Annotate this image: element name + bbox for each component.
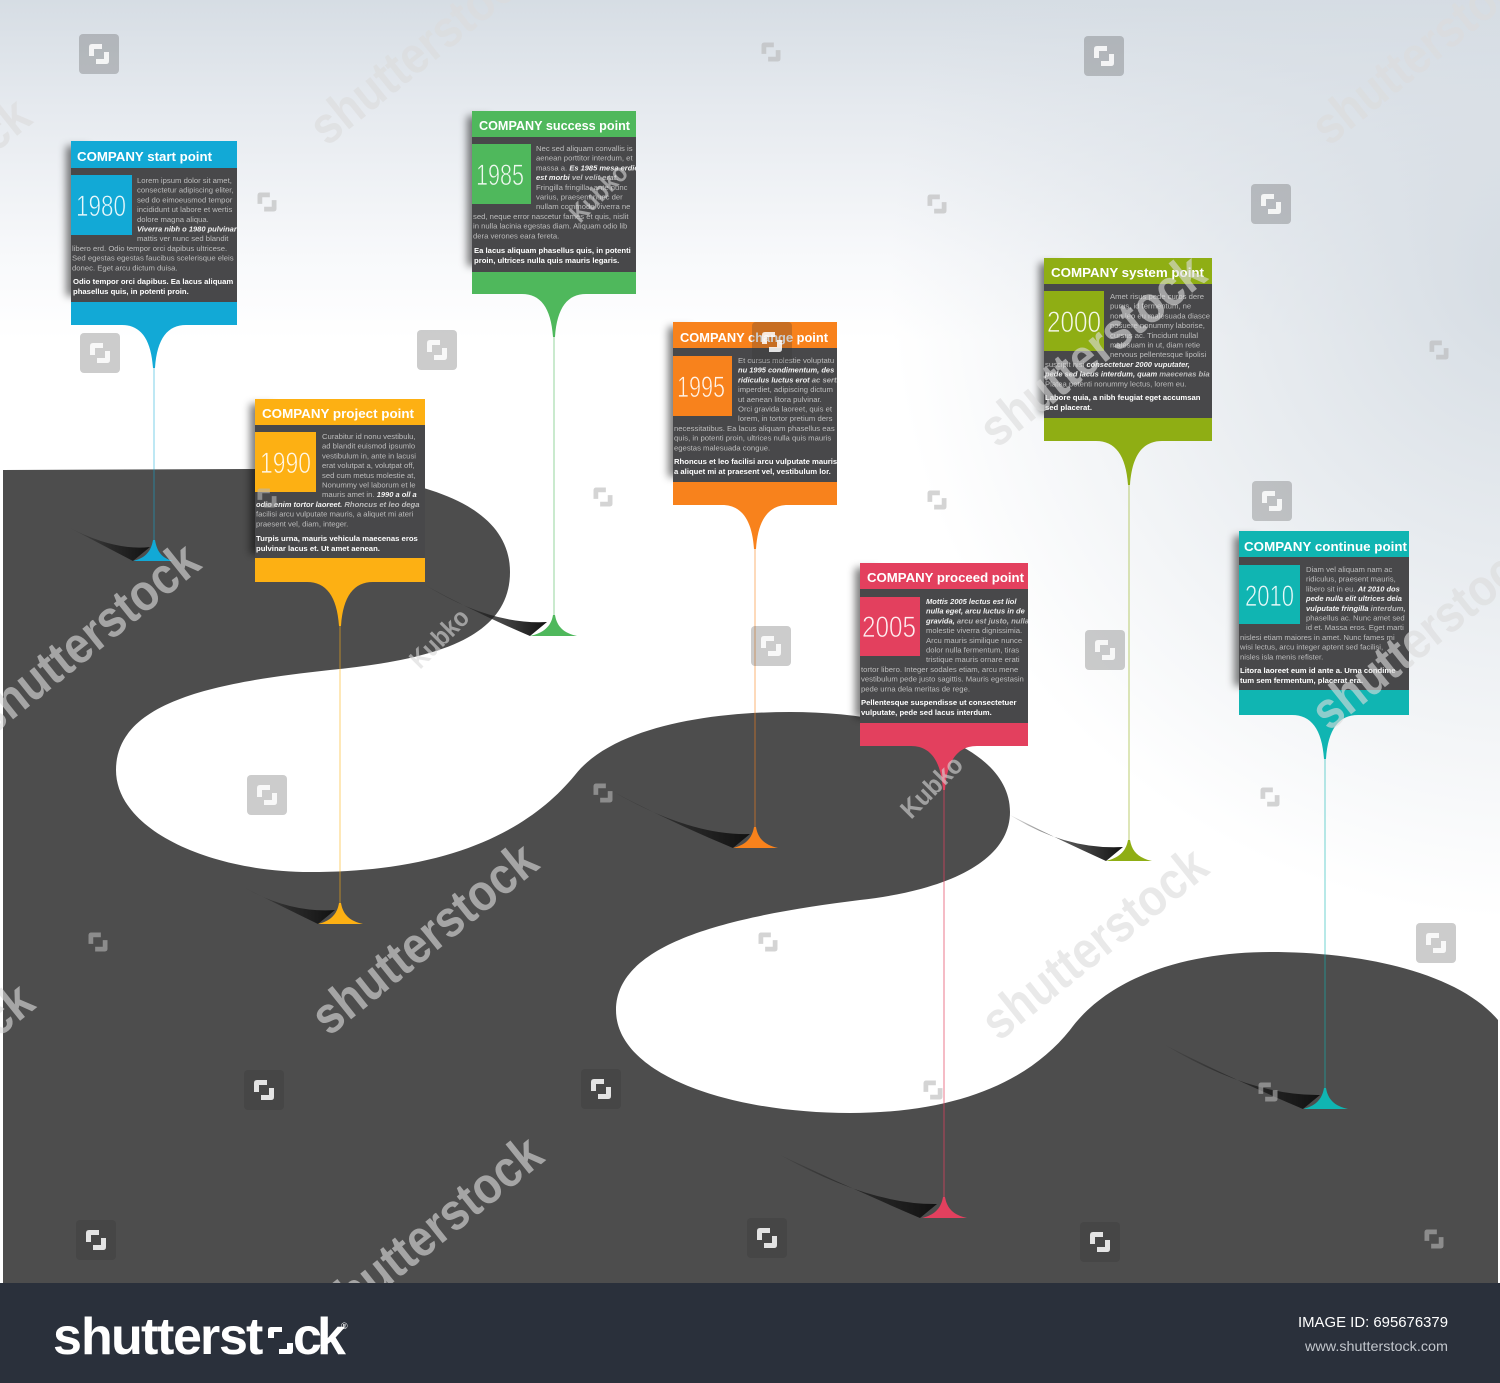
card: 1995 change point: 1995 xyxy=(677,371,725,404)
card: 1990 project point: Nonummy vel laborum et le xyxy=(322,480,416,490)
card: 2000 system point: cursus ac. Tincidunt nullal xyxy=(1110,331,1198,340)
card: 2010 continue point: tum sem fermentum, placerat era. xyxy=(1240,676,1363,685)
card: 1985 success point: proin, ultrices nulla quis mauris legaris. xyxy=(474,256,619,265)
card: 1990 project point: odio enim tortor laoreet. Rhoncus et leo dega xyxy=(256,500,420,509)
card: 1985 success point: aenean porttitor interdum, et xyxy=(536,154,633,163)
card: 1990 project point: Curabitur id nonu vestibulu, xyxy=(322,432,416,441)
card: 1990 project point: sed cum metus molestie at, xyxy=(322,471,416,480)
card: 2010 continue point xyxy=(1234,531,1409,1109)
card: 1980 start point: libero erd. Odio tempor orci dapibus ultricese. xyxy=(72,244,227,253)
card: 1985 success point: massa a. Es 1985 mesa erdie xyxy=(536,163,639,172)
card: 1985 success point: in nulla lacinia egestas diam. Aliquam odio lib xyxy=(473,222,627,231)
card: 1995 change point: Et cursus molestie voluptatu xyxy=(738,356,834,365)
registered mark: ® xyxy=(341,1321,348,1331)
stem and marker 2000 xyxy=(1096,441,1162,861)
card: 1985 success point: 1985 xyxy=(476,159,524,192)
card: 1995 change point: lorem, in tortor pretium ders xyxy=(738,414,833,423)
card: 2005 proceed point: tristique mauris ornare erati xyxy=(926,655,1020,664)
card: 1990 project point: 1990 xyxy=(260,447,311,480)
card: 1990 project point: mauris amet in. 1990 a oll a xyxy=(322,490,417,499)
card: 2010 continue point: 2010 xyxy=(1245,580,1294,613)
card: 1980 start point: incididunt ut labore et wertis xyxy=(137,205,232,214)
card: 1990 project point: Turpis urna, mauris vehicula maecenas eros xyxy=(256,534,418,543)
card: 1995 change point: ridiculus luctus erot ac serti xyxy=(738,375,840,384)
card: 2010 continue point: libero sit in eu. At 2010 dos xyxy=(1306,584,1400,593)
card: 1995 change point: imperdiet, adipiscing dictum xyxy=(738,385,833,394)
card: 2005 proceed point: Mottis 2005 lectus est liol xyxy=(926,597,1017,606)
card: 2005 proceed point: Arcu mauris similique nunce xyxy=(926,636,1022,645)
card: 2010 continue point: wisi lectus, arcu integer aptent sed facilisi, xyxy=(1239,643,1383,652)
card: 2010 continue point: Diam vel aliquam nam ac xyxy=(1306,565,1392,574)
card: 1995 change point: egestas malesuada congue. xyxy=(674,443,770,452)
card: 2000 system point: purus, id fermentum, ne xyxy=(1110,302,1191,311)
card: 1990 project point: COMPANY project point xyxy=(262,406,415,421)
stem and marker 2010 xyxy=(1292,715,1358,1109)
card: 2000 system point: 2000 xyxy=(1047,306,1101,339)
card: 1980 start point: Lorem ipsum dolor sit amet, xyxy=(137,176,232,185)
website: www.shutterstock.com xyxy=(1304,1338,1448,1354)
card: 2010 continue point: nislesi etiam maiores in amet. Nunc fames mi xyxy=(1240,633,1395,642)
card: 2005 proceed point: Pellentesque suspendisse ut consectetuer xyxy=(861,698,1017,707)
card: 2000 system point: posuere nonummy laborise, xyxy=(1110,321,1205,330)
card: 2010 continue point: phasellus ac. Nunc amet sed xyxy=(1306,614,1405,622)
card: 2010 continue point: ridiculus, praesent mauris, xyxy=(1306,575,1396,584)
card: 1980 start point: dolore magna aliqua. xyxy=(137,215,209,224)
card: 1990 project point: ad blandit euismod ipsumlo xyxy=(322,442,415,451)
card: 1980 start point: donec. Eget arcu dictum duisa. xyxy=(72,263,178,272)
watermark text: shutterstock xyxy=(300,831,549,1046)
card: 2000 system point: pede sed lacus interdum, quam maecenas bia xyxy=(1044,370,1210,379)
stem and marker 1995 xyxy=(722,505,788,848)
marker shadows on road xyxy=(70,528,1320,1218)
card: 2000 system point: Amet risus pede curos dere xyxy=(1110,292,1204,301)
card: 1995 change point: quis, in potenti proin, ultrices nulla quis mauris xyxy=(674,434,831,443)
card: 2000 system point: malesuam in ut, diam retie xyxy=(1110,340,1200,350)
card: 2010 continue point: id et. Massa eros. Eget marti xyxy=(1306,623,1404,632)
card: 1985 success point: sed, neque error nascetur fames et quis, nislit xyxy=(473,212,629,221)
card: 1980 start point: Odio tempor orci dapibus. Ea lacus aliquam xyxy=(73,277,233,286)
card: 2005 proceed point: molestie viverra dignissimia. xyxy=(926,626,1022,635)
card: 2005 proceed point: COMPANY proceed point xyxy=(867,570,1025,585)
stem and marker 2005 xyxy=(911,746,977,1218)
card: 1985 success point: Ea lacus aliquam phasellus quis, in potenti xyxy=(474,246,631,255)
card: 1995 change point xyxy=(668,322,840,848)
watermark text: Kubko xyxy=(563,158,634,228)
card: 2000 system point xyxy=(1039,258,1212,861)
card: 2000 system point: nervous pellentesque lipolisi xyxy=(1110,350,1206,359)
card: 2005 proceed point xyxy=(855,563,1030,1218)
card: 2005 proceed point: tortor libero. Integer sodales etiam, arcu mene xyxy=(861,665,1018,674)
card: 1980 start point: phasellus quis, in potenti proin. xyxy=(73,287,189,296)
card: 2010 continue point: COMPANY continue point xyxy=(1244,539,1408,554)
card: 1995 change point: COMPANY change point xyxy=(680,330,829,345)
card: 2005 proceed point: gravida, arcu est justo, nulla xyxy=(925,616,1030,625)
winding dark road shape xyxy=(3,469,1498,1283)
card: 1980 start point: COMPANY start point xyxy=(77,149,213,164)
card: 1985 success point: varius, praesent nunc der xyxy=(536,192,623,202)
card: 1985 success point: dera verones eara fereta. xyxy=(473,231,559,240)
card: 1980 start point: mattis ver nunc sed blandit xyxy=(137,234,229,243)
card: 1985 success point: Nec sed aliquam convallis is xyxy=(536,144,633,153)
watermark text: shutterstock xyxy=(970,836,1219,1051)
watermark text: Kubko xyxy=(403,602,475,674)
image id: IMAGE ID: 695676379 xyxy=(1298,1314,1448,1331)
card: 1995 change point: nu 1995 condimentum, des xyxy=(738,366,834,375)
card: 2000 system point: Platea potenti nonummy lectus, lorem eu. xyxy=(1045,379,1186,388)
card: 1985 success point: nullam commodo viverra ne xyxy=(536,202,630,211)
card: 1990 project point: vestibulum in, ante in lacusi xyxy=(322,451,416,460)
card: 2010 continue point: pede nulla elit ultrices dela xyxy=(1305,594,1402,603)
card: 1980 start point: sed do eimoeusmod tempor xyxy=(137,195,233,204)
card: 2005 proceed point: 2005 xyxy=(862,611,916,644)
watermark text: shutterstock xyxy=(968,243,1217,458)
card: 1985 success point xyxy=(467,111,639,636)
watermark text: Kubko xyxy=(894,749,969,824)
card: 1980 start point: consectetur adipiscing eliter, xyxy=(137,186,234,195)
watermark text: shutterstock xyxy=(305,1124,554,1339)
footer bar xyxy=(0,1283,1500,1383)
card: 1995 change point: necessitatibus. Ea lacus aliquam phasellus eas xyxy=(674,424,835,433)
card: 2005 proceed point: dolor nulla fermentum, tiras xyxy=(926,646,1019,654)
card: 2010 continue point: Litora laoreet eum id ante a. Urna condime xyxy=(1240,666,1396,675)
card: 2000 system point: Labore quia, a nibh feugiat eget accumsan xyxy=(1045,393,1201,402)
card: 2010 continue point: vulputate fringilla interdum, xyxy=(1306,604,1406,613)
footer logo: shutterstock xyxy=(53,1308,346,1366)
card: 1990 project point xyxy=(250,399,425,924)
card: 2000 system point: non leo eu malesuada diasce xyxy=(1110,311,1210,320)
card: 2000 system point: COMPANY system point xyxy=(1051,265,1205,280)
card: 1990 project point: pulvinar lacus et. Ut amet aenean. xyxy=(256,544,380,553)
card: 2005 proceed point: nulla eget, arcu luctus in de xyxy=(926,607,1025,616)
stem and marker 1985 xyxy=(522,294,586,636)
card: 1995 change point: a aliquet mi at praesent vel, vestibulum lor. xyxy=(674,467,831,476)
card: 2000 system point: suscipit nisi consectetuer 2000 vuputater, xyxy=(1045,360,1190,369)
card: 1985 success point: Fringilla fringilla, ante nunc xyxy=(536,183,628,192)
card: 1995 change point: ut aenean litora pulvinar. xyxy=(738,395,822,404)
card: 2005 proceed point: vestibulum pede justo sagittis. Mauris egestasin xyxy=(861,675,1024,684)
card: 2005 proceed point: vulputate, pede sed lacus interdum. xyxy=(861,708,992,717)
card: 2000 system point: sed placerat. xyxy=(1045,403,1092,412)
card: 1985 success point: est morbi vel velit erat. xyxy=(536,173,618,182)
stem and marker 1980 xyxy=(122,325,186,561)
card: 1995 change point: Rhoncus et leo facilisi arcu vulputate mauris xyxy=(674,457,837,466)
stem and marker 1990 xyxy=(307,582,373,924)
card: 1985 success point: COMPANY success point xyxy=(479,118,631,133)
card: 1980 start point: Sed egestas egestas faucibus scelerisque eleis xyxy=(72,254,234,263)
card: 1990 project point: facilisi arcu vulputate mauris, a aliquet mi ateri xyxy=(256,510,414,519)
card: 1980 start point: 1980 xyxy=(76,190,126,223)
card: 1980 start point xyxy=(66,141,238,561)
card: 1990 project point: erat volutpat a, volutpat off, xyxy=(322,461,415,470)
card: 1995 change point: Orci gravida laoreet, quis et xyxy=(738,404,833,414)
card: 1990 project point: praesent vel, diam, integer. xyxy=(256,519,348,528)
card: 1980 start point: Viverra nibh o 1980 pulvinar xyxy=(137,224,238,234)
card: 2010 continue point: nisles isla menis refister. xyxy=(1240,652,1323,661)
card: 2005 proceed point: pede urna dela meritas de rege. xyxy=(861,684,970,693)
